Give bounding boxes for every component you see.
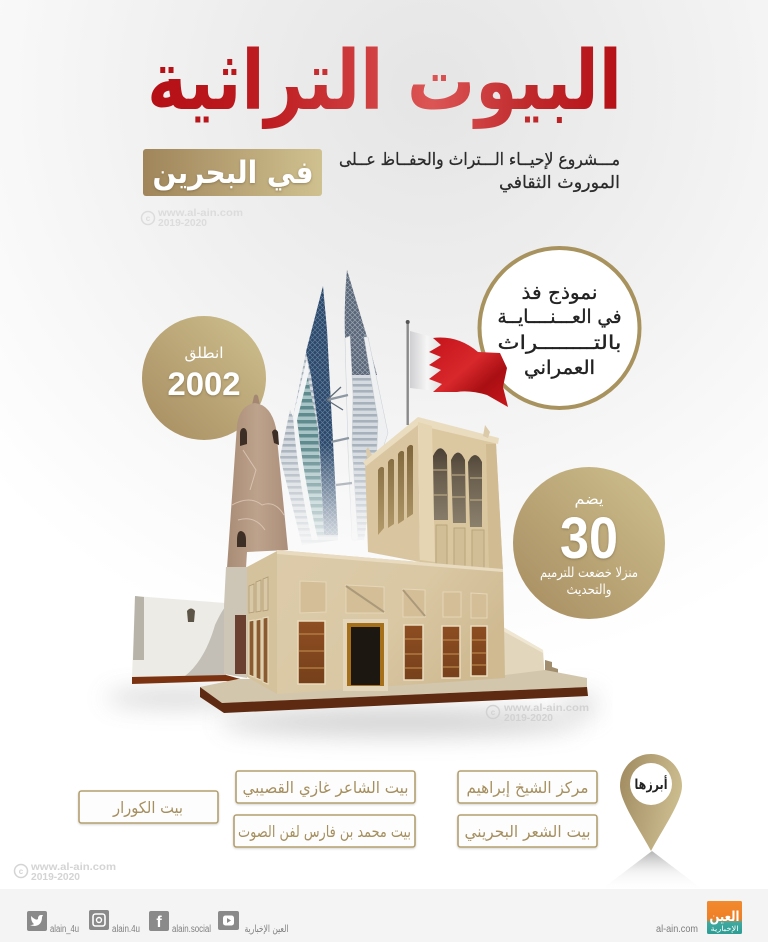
side windows	[249, 577, 268, 613]
box: Kurar House	[79, 791, 218, 823]
illustration: wind tower	[363, 417, 503, 572]
illustration: main house	[247, 550, 505, 694]
illustration: stair annex	[503, 627, 564, 682]
location pin	[602, 754, 702, 889]
door	[343, 619, 388, 691]
circle: launched 2002	[142, 316, 266, 440]
ground shadow under building	[105, 690, 598, 736]
illustration: platform	[200, 670, 588, 713]
footer socials: العين الإخبارية	[244, 924, 288, 935]
box: Kurar House: بيت الكورار	[112, 798, 183, 818]
watermark bottom: 2019-2020	[31, 872, 80, 883]
watermark middle: www.al-ain.com	[503, 703, 589, 714]
subtitle	[339, 150, 620, 193]
circle: model in heritage care: بالتــــــــراث	[498, 332, 622, 354]
subtitle: الموروث الثقافي	[499, 173, 620, 193]
footer socials: alain.4u	[112, 924, 140, 935]
badge: in Bahrain	[143, 149, 322, 196]
logo: العين	[710, 909, 740, 925]
watermark top	[142, 208, 243, 229]
illustration: flag of Bahrain	[406, 320, 508, 425]
icon: twitter	[27, 911, 47, 931]
circle: 30 houses: يضم	[574, 490, 604, 508]
watermark middle	[486, 703, 589, 724]
watermark middle: c	[491, 708, 496, 717]
circle: 30 houses	[513, 467, 665, 619]
box: Mohammed bin Faris House: بيت محمد بن فارس لفن الصوت	[238, 822, 411, 842]
logo	[707, 901, 742, 934]
illustration: left courtyard wall	[132, 596, 244, 684]
footer socials	[27, 910, 288, 935]
icon: facebook	[149, 911, 169, 931]
watermark top: c	[146, 214, 151, 223]
circle: 30 houses: والتحديث	[566, 582, 612, 598]
circle: model in heritage care	[480, 248, 640, 408]
watermark bottom: www.al-ain.com	[30, 862, 116, 873]
circle: model in heritage care: العمراني	[524, 357, 595, 379]
logo: الإخبارية	[710, 925, 739, 933]
box: Sheikh Ibrahim Center	[458, 771, 597, 803]
illustration: minaret	[224, 394, 288, 678]
circle: model in heritage care: نموذج فذ	[522, 282, 598, 304]
box: Bahraini Poetry House: بيت الشعر البحريني	[464, 822, 590, 842]
circle: model in heritage care: في العـــنــــايــة	[498, 306, 622, 328]
watermark bottom: c	[19, 867, 24, 876]
footer socials: alain_4u	[50, 924, 79, 935]
upper recessed panels	[300, 581, 487, 618]
windows	[298, 621, 487, 684]
title: البيوت التراثية	[147, 34, 622, 129]
watermark top: www.al-ain.com	[157, 208, 243, 219]
footer socials: alain.social	[172, 924, 211, 935]
box: Ghazi Al Gosaibi House: بيت الشاعر غازي القصيبي	[242, 778, 408, 798]
icon: instagram	[89, 910, 109, 930]
circle: launched 2002: انطلق	[184, 344, 224, 362]
box: Bahraini Poetry House	[458, 815, 597, 847]
icon: facebook: f	[156, 914, 162, 931]
box: Sheikh Ibrahim Center: مركز الشيخ إبراهيم	[466, 778, 588, 798]
watermark bottom	[14, 862, 116, 883]
watermark middle: 2019-2020	[504, 713, 553, 724]
badge: in Bahrain: في البحرين	[152, 155, 314, 191]
footer site address: al-ain.com	[656, 923, 698, 935]
footer band	[0, 889, 768, 942]
circle: 30 houses: 30	[560, 506, 618, 571]
illustration: Bahrain World Trade Center towers	[280, 270, 388, 545]
icon: youtube	[218, 911, 239, 930]
subtitle: مـــشروع لإحيــاء الـــتراث والحفــاظ عــلى	[339, 150, 620, 170]
box: Ghazi Al Gosaibi House	[236, 771, 415, 803]
box: Mohammed bin Faris House	[234, 815, 415, 847]
location pin: أبرزها	[634, 775, 668, 793]
circle: 30 houses: منزلا خضعت للترميم	[540, 565, 638, 581]
watermark top: 2019-2020	[158, 218, 207, 229]
circle: launched 2002: 2002	[168, 366, 240, 402]
